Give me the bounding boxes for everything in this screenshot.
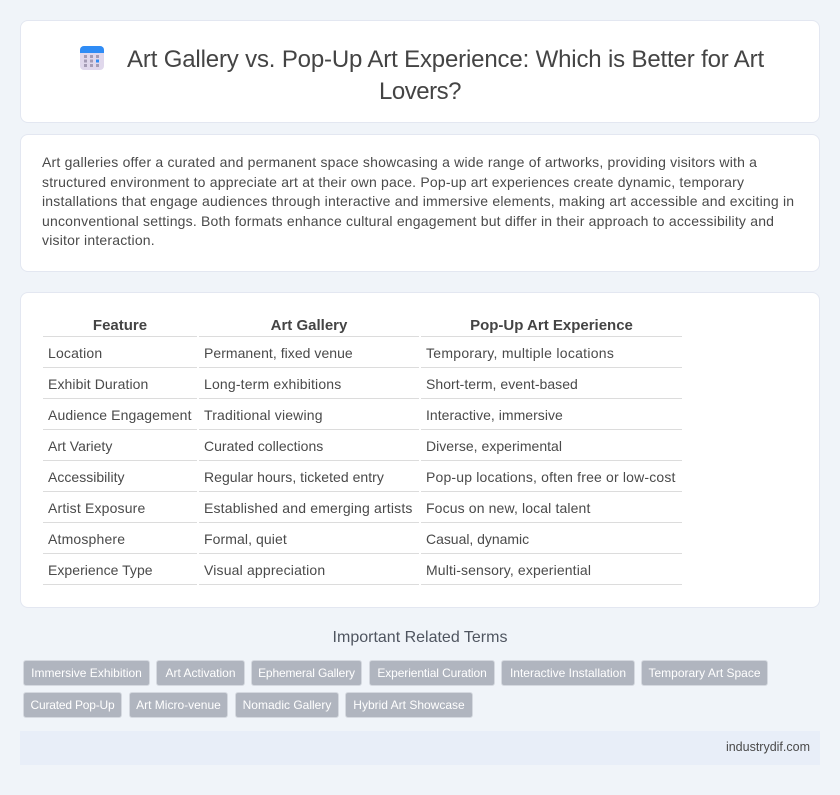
row: Accessibility: Regular hours, ticketed entry (204, 469, 384, 485)
footer source text: industrydif.com (726, 740, 810, 754)
row: Exhibit Duration (43, 376, 682, 399)
tag (23, 660, 150, 686)
row: Experience Type: Multi-sensory, experiential (426, 562, 591, 578)
row: Audience Engagement: Interactive, immersive (426, 407, 563, 423)
tag (369, 660, 495, 686)
row: Artist Exposure: Established and emerging artists (204, 500, 413, 516)
row: Atmosphere (43, 531, 682, 554)
row: Experience Type: Experience Type (48, 562, 153, 578)
row: Artist Exposure (43, 500, 682, 523)
tag: Interactive Installation (510, 666, 626, 680)
tag (501, 660, 635, 686)
intro paragraph: visitor interaction. (42, 232, 155, 248)
row: Art Variety: Diverse, experimental (426, 438, 562, 454)
row: Audience Engagement: Traditional viewing (204, 407, 323, 423)
row: Exhibit Duration: Long-term exhibitions (204, 376, 341, 392)
row: Experience Type (43, 562, 682, 585)
tag (129, 692, 228, 718)
tag: Art Activation (165, 666, 236, 680)
tag (641, 660, 768, 686)
row: Art Variety (43, 438, 682, 461)
intro paragraph: structured environment to appreciate art at their own pace. Pop-up art experiences create dynamic, temporary (42, 174, 744, 190)
tag: Temporary Art Space (648, 666, 761, 680)
tag (251, 660, 362, 686)
row: Atmosphere: Formal, quiet (204, 531, 287, 547)
tag (235, 692, 339, 718)
table header: Pop-Up Art Experience (470, 317, 633, 334)
tag: Curated Pop-Up (31, 698, 114, 712)
row: Atmosphere: Casual, dynamic (426, 531, 529, 547)
row: Atmosphere: Atmosphere (48, 531, 125, 547)
tag: Nomadic Gallery (243, 698, 331, 712)
icon: calendar (80, 46, 104, 70)
row: Location (43, 345, 682, 368)
tag (156, 660, 245, 686)
row: Audience Engagement: Audience Engagement (48, 407, 192, 423)
tag: Ephemeral Gallery (258, 666, 355, 680)
intro text panel (20, 134, 820, 272)
row: Location: Location (48, 345, 102, 361)
row: Art Variety: Art Variety (48, 438, 112, 454)
tag: Hybrid Art Showcase (353, 698, 465, 712)
row: Accessibility (43, 469, 682, 492)
tag: Art Micro-venue (136, 698, 221, 712)
comparison table panel (20, 292, 820, 608)
intro paragraph (42, 154, 794, 248)
intro paragraph: unconventional settings. Both formats enhance cultural engagement but differ in their approach to accessibility and (42, 213, 774, 229)
tag (345, 692, 473, 718)
intro paragraph: installations that engage audiences through interactive and immersive elements, making art accessible and exciting in (42, 193, 794, 209)
tag: Experiential Curation (377, 666, 487, 680)
row: Accessibility: Pop-up locations, often free or low-cost (426, 469, 676, 485)
table header (43, 317, 682, 337)
title: Lovers? (379, 78, 461, 105)
table header: Feature (93, 317, 147, 334)
title: Art Gallery vs. Pop-Up Art Experience: Which is Better for Art (127, 46, 764, 73)
row: Exhibit Duration: Exhibit Duration (48, 376, 148, 392)
row: Exhibit Duration: Short-term, event-based (426, 376, 578, 392)
tag (23, 692, 122, 718)
row: Artist Exposure: Focus on new, local talent (426, 500, 590, 516)
row: Accessibility: Accessibility (48, 469, 125, 485)
related terms heading: Important Related Terms (333, 629, 507, 646)
row: Artist Exposure: Artist Exposure (48, 500, 145, 516)
table header: Art Gallery (271, 317, 347, 334)
tag: Immersive Exhibition (31, 666, 142, 680)
related terms tags (23, 660, 768, 718)
title (127, 46, 764, 105)
row: Location: Permanent, fixed venue (204, 345, 353, 361)
intro paragraph: Art galleries offer a curated and permanent space showcasing a wide range of artworks, providing visitors with a (42, 154, 757, 170)
row: Location: Temporary, multiple locations (426, 345, 614, 361)
footer bar (20, 731, 820, 765)
header panel (20, 20, 820, 123)
row: Experience Type: Visual appreciation (204, 562, 325, 578)
row: Art Variety: Curated collections (204, 438, 323, 454)
row: Audience Engagement (43, 407, 682, 430)
